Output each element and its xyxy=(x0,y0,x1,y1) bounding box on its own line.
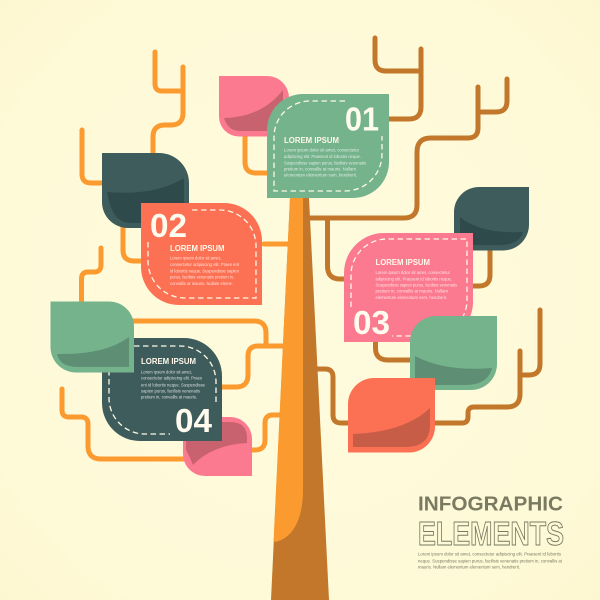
panel 02: coral leaf: LOREM IPSUM xyxy=(170,244,224,253)
title description: neque. Suspendisse sapien purus, facilisis venenatis pretium in, convallis at xyxy=(418,558,563,564)
title: elements outline: ELEMENTS xyxy=(418,516,564,553)
panel 01: green leaf: Lorem ipsum dolor sit amet, consectetur xyxy=(284,148,360,152)
panel 03: pink leaf xyxy=(344,233,473,342)
panel 01: green leaf: LOREM IPSUM xyxy=(284,136,339,145)
panel 04: dark leaf: Lorem ipsum dolor sit amet, xyxy=(141,370,192,374)
title block xyxy=(418,492,564,570)
leaf: dark right xyxy=(454,187,529,250)
title description xyxy=(418,552,563,570)
panel 02: coral leaf: consectetur adipiscing elit. Praes ent xyxy=(170,262,240,267)
panel 02: coral leaf: convallis at mauris. Nullam eleme. xyxy=(170,281,233,286)
panel 02: coral leaf: purus, facilisis venenatis pretium in, xyxy=(170,274,234,280)
panel 01: green leaf: pretium in, convallis at mauris. Nullam xyxy=(284,166,356,172)
panel 03: pink leaf: elementum elementum sem, hendrerit. xyxy=(376,295,447,300)
panel 01: green leaf: adipiscing elit. Praesent id lobortis neque. xyxy=(284,154,361,159)
panel 02: coral leaf: 02 xyxy=(150,207,187,244)
title description: Lorem ipsum dolor sit amet, consectetur adipiscing elit. Praesent id lobortis xyxy=(418,552,561,556)
panel 04: dark leaf: ent id lobortis neque. Suspendisse xyxy=(141,382,206,388)
panel 02: coral leaf xyxy=(141,203,262,305)
leaf: pink top xyxy=(219,76,289,136)
panel 04: dark leaf xyxy=(102,338,222,441)
panel 01: green leaf: Suspendisse sapien purus, facilisis venenatis xyxy=(284,160,366,166)
tree trunk xyxy=(271,198,329,600)
panel 02: coral leaf: id lobortis neque. Suspendisse sapien xyxy=(170,268,240,274)
panel 04: dark leaf: pretium in, convallis at mauris. xyxy=(141,394,197,400)
panel 02: coral leaf: Lorem ipsum dolor sit amet, xyxy=(170,256,221,260)
title: infographic: INFOGRAPHIC xyxy=(418,492,563,516)
panel 04: dark leaf: sapien purus, facilisis venenatis xyxy=(141,388,200,394)
panel 01: green leaf: 01 xyxy=(345,100,379,138)
left branches xyxy=(62,52,296,459)
panel 03: pink leaf: Suspendisse sapien purus, facilisis venenatis xyxy=(376,282,457,288)
leaf: pink bottom xyxy=(183,417,252,476)
panel 01: green leaf: elementum elementum sem, hendrerit. xyxy=(284,172,357,178)
panel 03: pink leaf: pretium in, convallis at mauris. Nullam xyxy=(376,288,448,294)
panel 04: dark leaf: 04 xyxy=(175,402,213,439)
panel 03: pink leaf: adipiscing elit. Praesent id lobortis neque. xyxy=(376,276,452,282)
leaf: green right xyxy=(410,316,497,390)
right branches xyxy=(305,38,540,423)
panel 03: pink leaf: Lorem ipsum dolor sit amet, consectetur xyxy=(376,270,451,275)
panel 01: green leaf xyxy=(267,94,389,198)
panel 04: dark leaf: LOREM IPSUM xyxy=(141,357,196,366)
panel 04: dark leaf: consectetur adipiscing elit. Praes xyxy=(141,376,202,380)
title description: mauris. Nullam elementum elementum sem, hendrerit. xyxy=(418,564,520,570)
panel 03: pink leaf: 03 xyxy=(353,304,390,341)
leaf: dark top left xyxy=(102,153,189,228)
leaf: coral lower right xyxy=(348,378,435,452)
panel 03: pink leaf: LOREM IPSUM xyxy=(376,258,430,267)
leaf: green left xyxy=(50,302,134,372)
